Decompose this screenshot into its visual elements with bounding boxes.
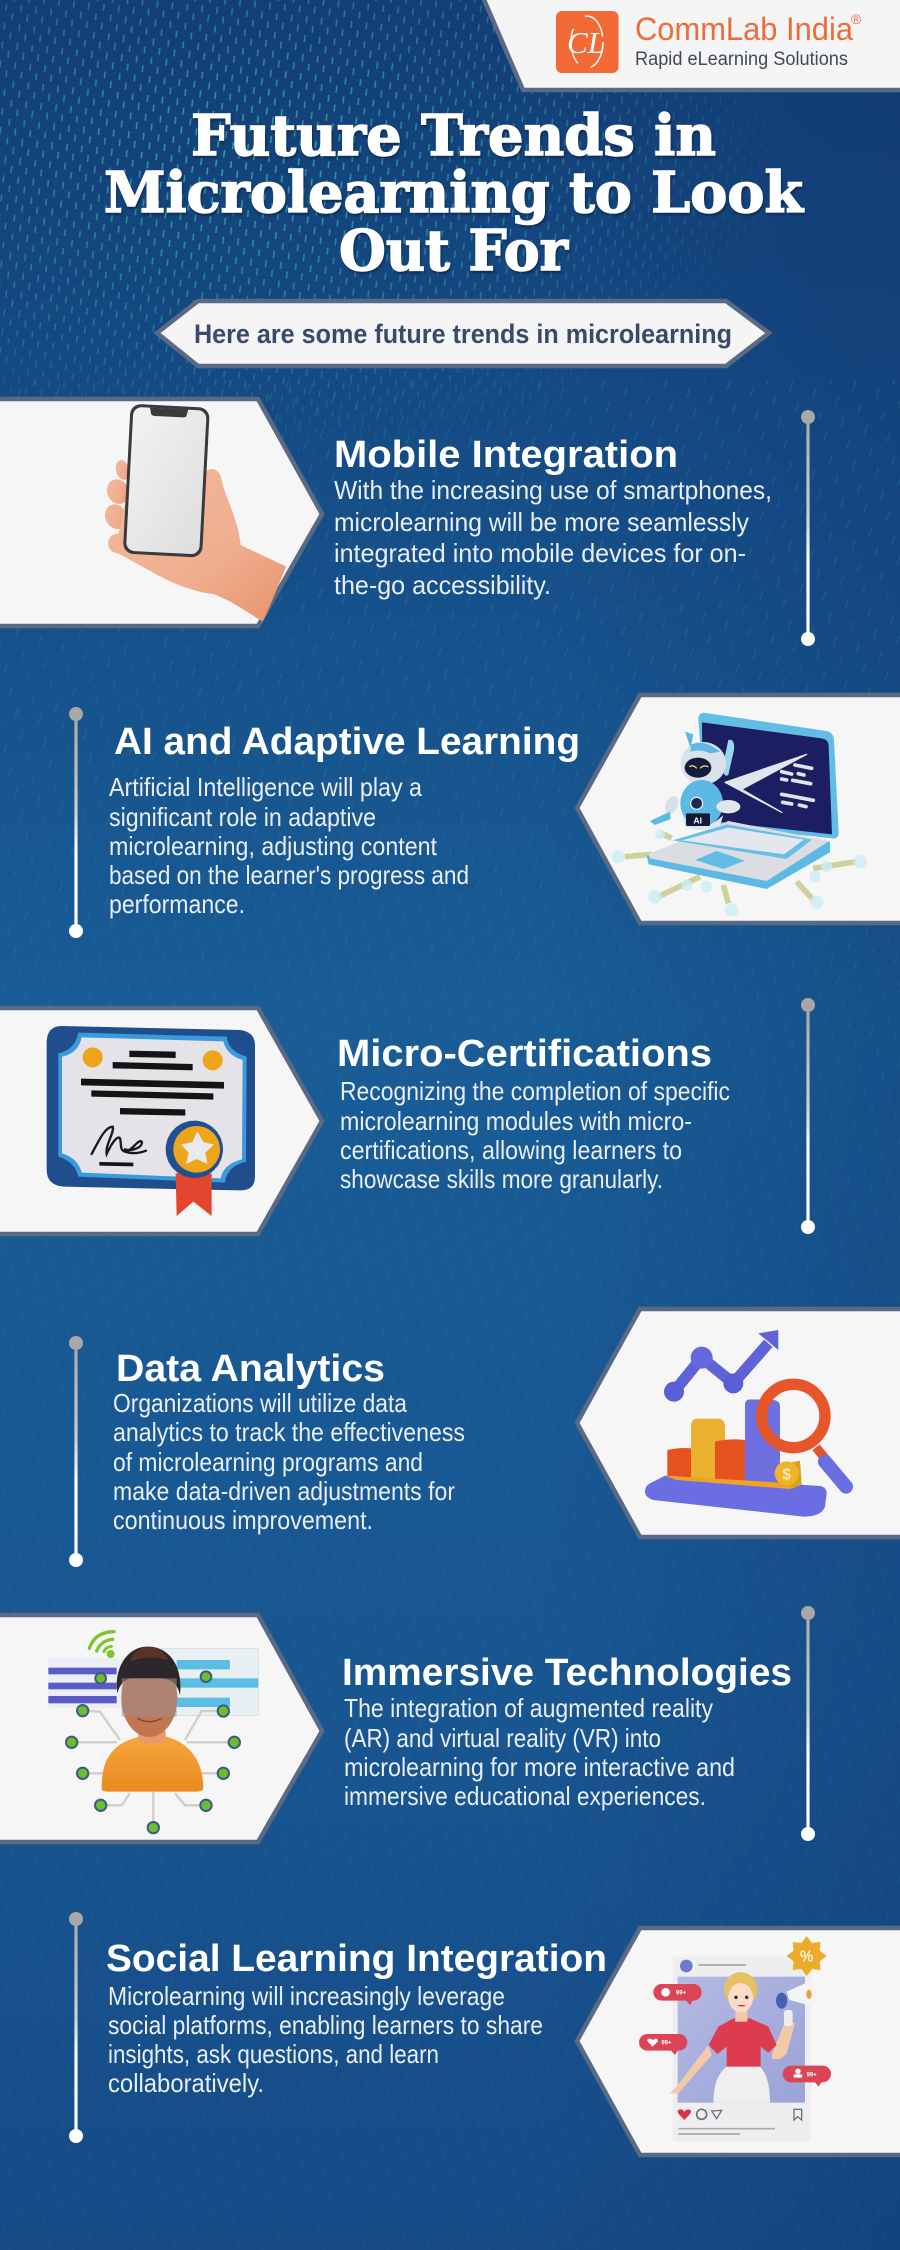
body text: collaboratively.: [108, 2068, 264, 2098]
body text: integrated into mobile devices for on-: [334, 538, 746, 568]
heading: Micro-Certifications: [337, 1033, 712, 1075]
reaction bubble: followers: [783, 2066, 831, 2087]
body text: [340, 1076, 730, 1194]
icon: robot on laptop: [612, 713, 867, 917]
image card: [0, 1615, 322, 1842]
body text: immersive educational experiences.: [344, 1781, 706, 1811]
body text: [109, 772, 469, 919]
logo mark: [556, 11, 618, 73]
body text: (AR) and virtual reality (VR) into: [344, 1723, 661, 1753]
icon: person with VR and network nodes: [48, 1632, 258, 1833]
registered mark: ®: [851, 11, 862, 27]
body text: microlearning modules with micro-: [340, 1106, 692, 1136]
panel: mobile integration: [0, 399, 815, 646]
timeline line: [69, 1336, 83, 1567]
body text: The integration of augmented reality: [344, 1693, 713, 1723]
coin symbol: $: [782, 1466, 791, 1483]
heading: Mobile Integration: [334, 434, 678, 476]
body text: With the increasing use of smartphones,: [334, 475, 772, 505]
body text: make data-driven adjustments for: [113, 1476, 455, 1506]
body text: showcase skills more granularly.: [340, 1164, 663, 1194]
panel: social learning integration: [69, 1912, 900, 2155]
heading: Social Learning Integration: [106, 1938, 607, 1980]
body text: analytics to track the effectiveness: [113, 1417, 465, 1447]
image card: [577, 1928, 900, 2155]
icon: social media post with woman and megaphone: [639, 1936, 831, 2142]
badge symbol: %: [800, 1949, 814, 1966]
body text: Microlearning will increasingly leverage: [108, 1981, 505, 2011]
panel: immersive technologies: [0, 1606, 815, 1842]
panel: data analytics: [69, 1309, 900, 1567]
timeline line: [801, 998, 815, 1234]
timeline line: [69, 1912, 83, 2143]
panel: micro-certifications: [0, 998, 815, 1234]
title: [104, 103, 804, 284]
body text: of microlearning programs and: [113, 1447, 423, 1477]
timeline line: [801, 410, 815, 646]
body text: microlearning for more interactive and: [344, 1752, 735, 1782]
body text: social platforms, enabling learners to share: [108, 2010, 543, 2040]
reaction bubble: views: [653, 1984, 702, 2005]
reaction bubble: followers: 99+: [807, 2072, 817, 2078]
logo tagline: Rapid eLearning Solutions: [635, 49, 848, 70]
timeline line: [801, 1606, 815, 1841]
body text: Recognizing the completion of specific: [340, 1076, 730, 1106]
body text: Organizations will utilize data: [113, 1388, 407, 1418]
image card: [577, 1309, 900, 1537]
icon: certificate: [47, 1026, 255, 1216]
subtitle banner: Here are some future trends in microlearning: [194, 319, 732, 349]
body text: microlearning, adjusting content: [109, 831, 438, 861]
body text: microlearning will be more seamlessly: [334, 507, 749, 537]
image card: [0, 399, 322, 626]
reaction bubble: likes: [639, 2034, 687, 2055]
body text: [113, 1388, 465, 1535]
body text: Artificial Intelligence will play a: [109, 772, 422, 802]
heading: Immersive Technologies: [342, 1652, 792, 1694]
panel: AI and adaptive learning: [69, 695, 900, 938]
title: Future Trends in: [191, 103, 716, 169]
body text: performance.: [109, 889, 245, 919]
body text: continuous improvement.: [113, 1505, 373, 1535]
image card: [577, 695, 900, 923]
icon: hand holding phone: [101, 404, 286, 622]
logo mark: CL: [567, 25, 605, 60]
reaction bubble: likes: 99+: [661, 2041, 672, 2047]
logo wordmark: CommLab India: [635, 11, 853, 47]
logo panel: [482, 0, 900, 90]
image card: [0, 1008, 322, 1234]
reaction bubble: views: 99+: [676, 1991, 687, 1997]
body text: based on the learner's progress and: [109, 860, 469, 890]
heading: Data Analytics: [116, 1348, 385, 1390]
body text: significant role in adaptive: [109, 802, 376, 832]
title: Microlearning to Look: [104, 160, 804, 226]
title: Out For: [339, 218, 569, 284]
body text: certifications, allowing learners to: [340, 1135, 682, 1165]
body text: [108, 1981, 543, 2098]
body text: insights, ask questions, and learn: [108, 2039, 439, 2069]
body text: [334, 475, 772, 600]
timeline line: [69, 707, 83, 938]
icon: chart with magnifier: [645, 1330, 846, 1517]
AI chip label: AI: [693, 815, 702, 825]
body text: [344, 1693, 735, 1811]
heading: AI and Adaptive Learning: [114, 721, 580, 763]
subtitle banner: [157, 301, 769, 366]
body text: the-go accessibility.: [334, 570, 551, 600]
